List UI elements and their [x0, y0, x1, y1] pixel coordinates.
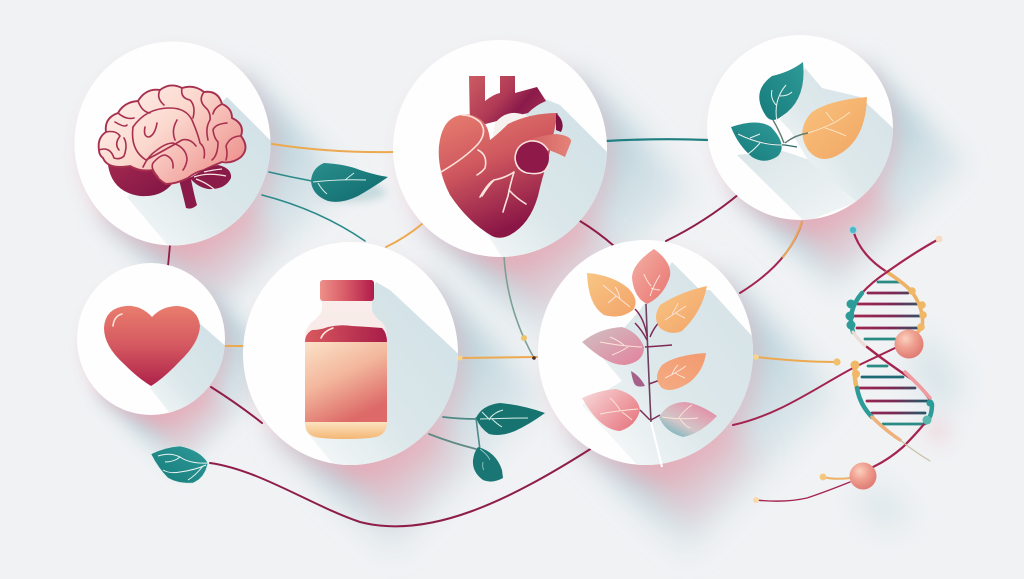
plant flat shadow — [582, 262, 760, 470]
connector lines — [168, 139, 895, 526]
leaf: far left teal — [151, 446, 208, 483]
panel: anatomical heart — [393, 40, 607, 257]
bottle flat shadow — [305, 282, 465, 470]
panel: supplement bottle — [243, 242, 465, 470]
icon: brain — [99, 85, 246, 209]
panel: brain — [74, 42, 270, 246]
icon: heart — [104, 306, 200, 386]
icon: bottle — [305, 280, 387, 439]
icon highlight — [113, 314, 122, 326]
icon: leaves — [731, 62, 867, 161]
anatomical heart flat shadow — [486, 99, 607, 257]
panel: small heart — [77, 263, 230, 420]
leaf: small teal on upper connector — [311, 163, 388, 202]
brain flat shadow — [127, 97, 270, 246]
small heart flat shadow — [150, 324, 225, 412]
panel: teal and orange leaves — [707, 35, 895, 222]
leaf: bottle upper teal — [476, 403, 545, 435]
connector nodes — [458, 335, 841, 366]
infographic canvas — [74, 35, 962, 548]
icon: plant — [582, 249, 717, 467]
panel: plant — [538, 240, 760, 470]
soft long shadows behind circles — [80, 45, 967, 555]
leaves flat shadow — [737, 68, 895, 222]
icon: anatomical heart — [439, 76, 571, 238]
leaf: bottle lower teal — [473, 447, 503, 482]
icon: DNA helix — [753, 226, 942, 503]
